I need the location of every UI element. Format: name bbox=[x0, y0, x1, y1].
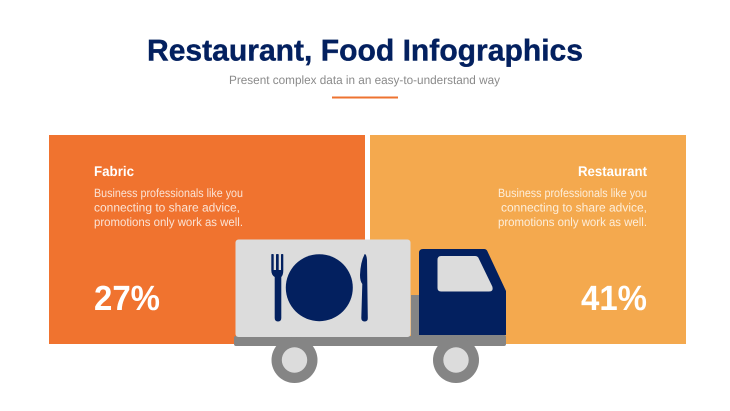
fabric description: Business professionals like you bbox=[94, 186, 243, 200]
panel: fabric bbox=[49, 135, 365, 344]
restaurant percentage: 41% bbox=[581, 279, 647, 318]
restaurant heading: Restaurant bbox=[578, 163, 647, 179]
truck rear wheel bbox=[272, 337, 318, 383]
truck cab window bbox=[438, 256, 493, 292]
truck front wheel bbox=[433, 337, 479, 383]
fabric description: promotions only work as well. bbox=[94, 215, 243, 229]
restaurant description bbox=[498, 186, 647, 229]
panel: restaurant bbox=[370, 135, 686, 344]
fabric description bbox=[94, 186, 243, 229]
truck chassis bbox=[234, 295, 506, 346]
accent underline bbox=[332, 96, 398, 98]
title: Restaurant, Food Infographics bbox=[147, 34, 583, 68]
icon: delivery truck bbox=[234, 240, 506, 383]
truck cargo box bbox=[236, 240, 410, 337]
fabric description: connecting to share advice, bbox=[94, 200, 240, 214]
restaurant description: connecting to share advice, bbox=[501, 200, 647, 214]
icon: plate bbox=[286, 254, 353, 321]
restaurant description: Business professionals like you bbox=[498, 186, 647, 200]
icon: fork bbox=[271, 254, 283, 322]
subtitle: Present complex data in an easy-to-understand way bbox=[229, 73, 500, 87]
fabric percentage: 27% bbox=[94, 279, 160, 318]
fabric heading: Fabric bbox=[94, 163, 134, 179]
truck cab bbox=[419, 249, 506, 335]
icon: knife bbox=[360, 254, 368, 322]
restaurant description: promotions only work as well. bbox=[498, 215, 647, 229]
